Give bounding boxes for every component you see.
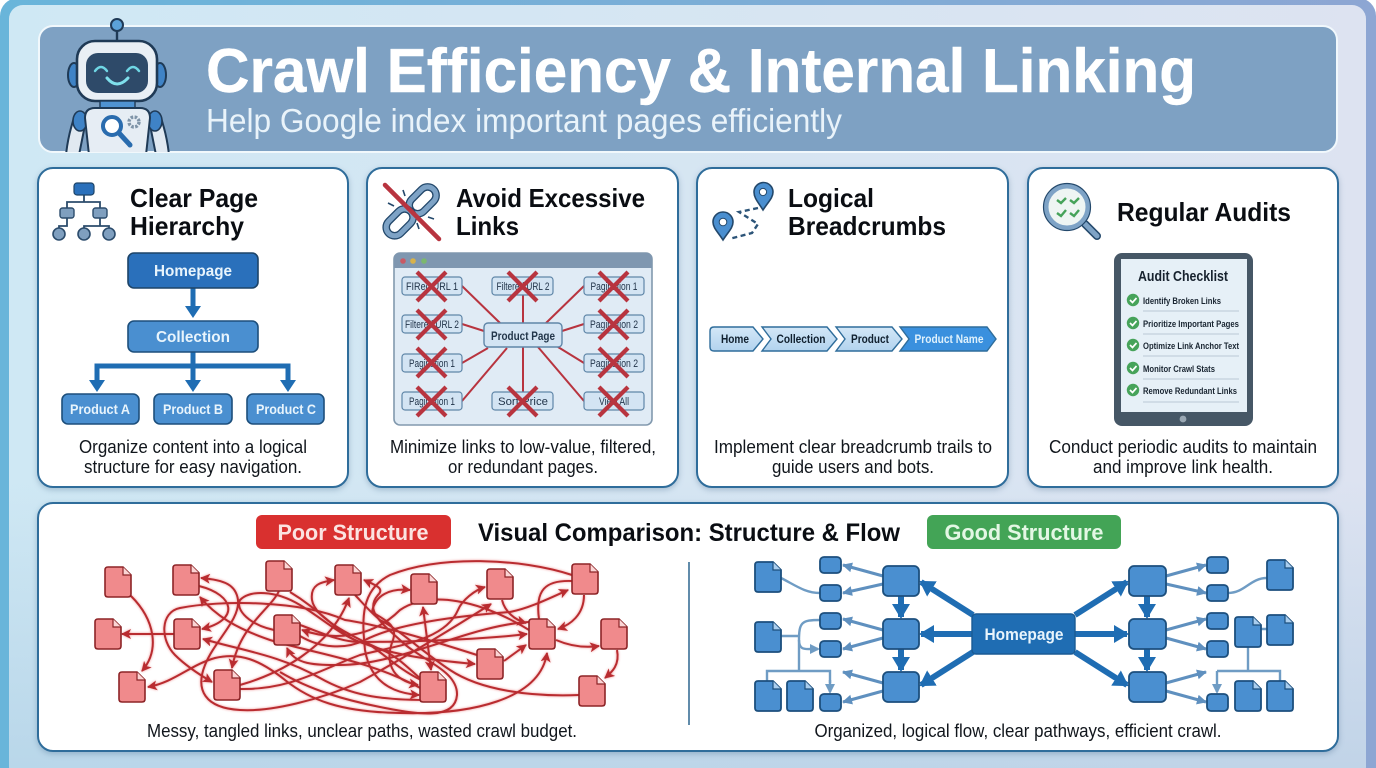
badge: good structure [927, 515, 1121, 549]
browser diagram with crossed-out links: Pagination 2 [590, 319, 638, 331]
hierarchy diagram [62, 253, 324, 424]
badge: good structure: Good Structure [944, 520, 1104, 545]
panel: avoid excessive links [367, 168, 678, 487]
description: and improve link health. [1093, 457, 1273, 477]
icon: robot mascot [66, 19, 169, 155]
description: guide users and bots. [772, 457, 934, 477]
description: Organize content into a logical [79, 437, 307, 457]
description: Implement clear breadcrumb trails to [714, 437, 992, 457]
breadcrumb trail: Product [851, 334, 889, 346]
breadcrumb trail: Collection [776, 334, 826, 346]
subtitle: Help Google index important pages efficiently [206, 102, 842, 139]
title: Crawl Efficiency & Internal Linking [206, 37, 1196, 106]
hierarchy diagram: Product C [256, 401, 316, 417]
description: Conduct periodic audits to maintain [1049, 437, 1317, 457]
chart: good organized structure [755, 557, 1293, 711]
panel: regular audits [1028, 168, 1338, 487]
browser diagram with crossed-out links: View All [599, 396, 629, 408]
browser diagram with crossed-out links: Pagination 1 [409, 396, 455, 408]
tablet checklist: Optimize Link Anchor Text [1143, 341, 1240, 352]
icon: map pins [713, 182, 773, 240]
panel: logical breadcrumbs [697, 168, 1008, 487]
breadcrumb trail [710, 327, 996, 351]
heading: Logical [788, 183, 874, 213]
icon: magnifier with checks [1044, 184, 1097, 236]
caption: good structure: Organized, logical flow, clear pathways, efficient crawl. [814, 721, 1222, 741]
browser diagram with crossed-out links: Filtered URL 2 [405, 319, 459, 331]
tablet checklist: Prioritize Important Pages [1143, 319, 1239, 330]
chart: poor tangled structure [95, 561, 627, 714]
heading: Links [456, 211, 519, 241]
caption: poor structure: Messy, tangled links, unclear paths, wasted crawl budget. [147, 721, 577, 741]
heading: Clear Page [130, 183, 258, 213]
tablet checklist [1114, 253, 1253, 426]
badge: poor structure [256, 515, 451, 549]
heading: Hierarchy [130, 211, 245, 241]
chart: good organized structure: Homepage [984, 625, 1064, 644]
browser diagram with crossed-out links [394, 253, 652, 425]
breadcrumb trail: Product Name [914, 334, 984, 346]
icon: hierarchy [53, 183, 115, 240]
hierarchy diagram: Homepage [154, 263, 232, 280]
heading: Regular Audits [1117, 197, 1291, 227]
browser diagram with crossed-out links: Product Page [491, 329, 555, 343]
tablet checklist: Audit Checklist [1138, 269, 1228, 285]
panel: clear page hierarchy [38, 168, 348, 487]
browser diagram with crossed-out links: Pagination 1 [409, 358, 455, 370]
hierarchy diagram: Collection [156, 329, 230, 346]
browser diagram with crossed-out links: Sort Price [498, 396, 548, 408]
tablet checklist: Monitor Crawl Stats [1143, 364, 1215, 375]
heading: Avoid Excessive [456, 183, 645, 213]
browser diagram with crossed-out links: FIRec URL 1 [406, 281, 458, 293]
description: structure for easy navigation. [84, 457, 302, 477]
comparison heading: Visual Comparison: Structure & Flow [478, 519, 901, 547]
description: Minimize links to low-value, filtered, [390, 437, 656, 457]
browser diagram with crossed-out links: Filtered URL 2 [496, 281, 550, 293]
breadcrumb trail: Home [721, 334, 749, 346]
icon: broken link [383, 183, 440, 239]
description: or redundant pages. [448, 457, 598, 477]
panel: visual comparison [38, 503, 1338, 751]
hierarchy diagram: Product A [70, 401, 130, 417]
browser diagram with crossed-out links: Pagination 2 [590, 358, 638, 370]
tablet checklist: Remove Redundant Links [1143, 386, 1237, 397]
browser diagram with crossed-out links: Pagination 1 [590, 281, 638, 293]
header banner [39, 19, 1337, 155]
hierarchy diagram: Product B [163, 401, 223, 417]
tablet checklist: Identify Broken Links [1143, 296, 1221, 307]
heading: Breadcrumbs [788, 211, 946, 241]
badge: poor structure: Poor Structure [278, 520, 428, 545]
